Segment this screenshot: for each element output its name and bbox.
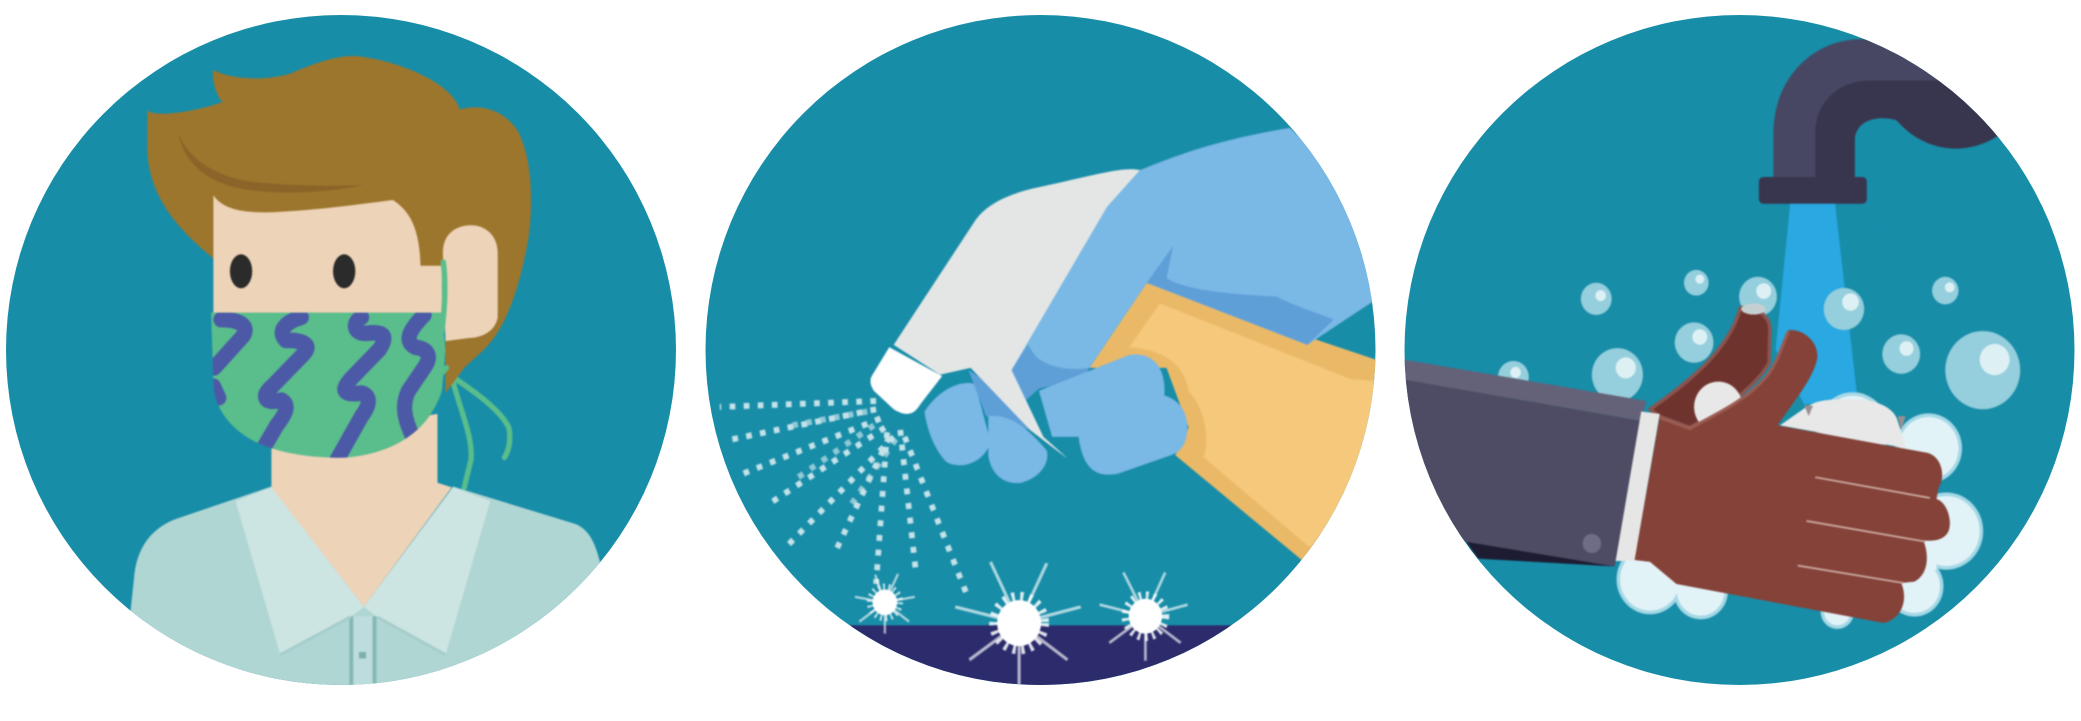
nozzle — [870, 347, 942, 414]
sprayer head — [894, 169, 1140, 458]
ear loop strings — [440, 258, 450, 376]
mask squiggle pattern — [213, 315, 428, 460]
glove hand — [1012, 128, 1404, 371]
faucet flange — [1759, 177, 1867, 204]
panel: gloved hand with disinfectant spray — [700, 15, 1404, 699]
shirt placket and button — [348, 616, 377, 685]
glove first finger — [924, 383, 990, 465]
sparkle left — [855, 574, 915, 634]
sparkle centre — [955, 562, 1081, 685]
shirt — [129, 486, 670, 703]
glove fingers on bottle — [1039, 354, 1187, 475]
mask ties behind head — [453, 377, 510, 487]
hair — [147, 56, 531, 393]
glove shadow — [1012, 246, 1334, 402]
glove finger shadow — [968, 370, 1030, 430]
panel: person wearing a face mask — [6, 15, 676, 703]
foam between hands — [1694, 382, 1743, 432]
soap bubbles — [1498, 270, 2020, 409]
near hand — [1635, 330, 1950, 623]
surface band — [849, 624, 1232, 685]
spray droplets — [720, 401, 966, 593]
teal gap under faucet — [1855, 118, 2081, 230]
soap foam — [1617, 392, 1983, 629]
neck — [271, 414, 452, 607]
hair shadow — [180, 138, 357, 192]
bottle label highlight — [1129, 303, 1387, 547]
face mask — [211, 313, 446, 458]
thumb edge highlight — [1660, 331, 1789, 429]
sleeve — [1390, 357, 1646, 566]
shirt collar — [236, 487, 490, 655]
sparkle right — [1100, 572, 1188, 661]
trigger — [971, 368, 1067, 458]
finger separators — [1798, 477, 1930, 583]
faucet pipe — [1773, 39, 2081, 177]
far hand thumb — [1650, 308, 1770, 428]
eye right — [333, 254, 355, 288]
thumb tip foam — [1741, 303, 1766, 315]
glove second finger — [988, 416, 1047, 483]
face — [213, 195, 442, 317]
eye left — [230, 254, 252, 288]
water stream — [1776, 204, 1857, 405]
panel: washing hands under a tap — [1390, 15, 2081, 685]
ear — [443, 225, 498, 341]
shirt cuff — [1616, 412, 1660, 561]
bottle body — [1089, 283, 1387, 561]
